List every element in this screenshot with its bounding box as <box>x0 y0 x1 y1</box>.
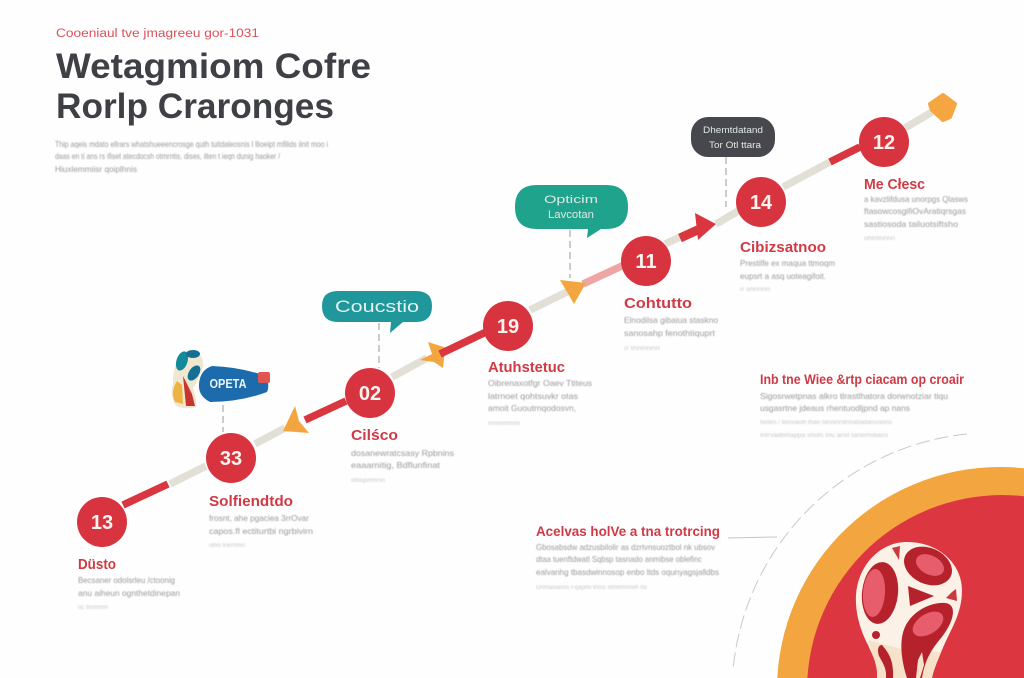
node 19: 19 <box>497 316 519 338</box>
step: Me Clesc: ftasowcosgifiOvAratiqrsgas <box>864 206 966 216</box>
step: Atuhstetuc: Oibrenaxotfgr Oaev Ttiteus <box>488 378 592 388</box>
step: Dusto: Düsto <box>78 557 116 573</box>
node 12: 12 <box>873 132 895 154</box>
step: Cohtutto <box>624 296 718 352</box>
node 11: 11 <box>635 251 657 273</box>
node 19 <box>483 301 533 351</box>
timeline track <box>123 112 932 505</box>
node 13: 13 <box>91 512 113 534</box>
intro text: daas en ti ans rs ifiset atecdocsh otmrntis, dises, ilten t ieqn dunig haoker / <box>55 151 281 161</box>
node 33 <box>206 433 256 483</box>
callout: dark: Tor Otl ttara <box>709 140 761 150</box>
node 14 <box>736 177 786 227</box>
step: Solfiendtdo <box>209 494 313 549</box>
callout: Opticim: Opticim <box>544 194 598 206</box>
text block: lower centre: Dnmasianos Fqapnn tnlso stmnmnneh nu <box>536 585 647 591</box>
callout: Opera badge with logo <box>172 350 270 432</box>
intro text <box>55 139 328 174</box>
connector line to lower text block <box>728 537 777 538</box>
icon: trophy <box>856 539 962 678</box>
step: Cibizsatnoo: Cibizsatnoo <box>740 240 826 256</box>
callout: dark <box>691 117 775 207</box>
step: Cohtutto: Elnodilsa gibaiua staskno <box>624 315 718 325</box>
step: Dusto: Becsaner odolsrleu /ctoonig <box>78 575 175 585</box>
step: Cibizsatnoo: Prestilfe ex maqua ttmoqm <box>740 258 835 268</box>
step: Atuhstetuc: Atuhstetuc <box>488 360 565 376</box>
step: Atuhstetuc <box>488 360 592 427</box>
step: Cilsco <box>351 428 454 484</box>
node 13 <box>77 497 127 547</box>
node 02 <box>345 368 395 418</box>
callout: Coucstio: Coucstio <box>335 297 419 316</box>
callout: Opticim <box>515 185 628 278</box>
dashed arc around emblem <box>733 434 967 670</box>
step: Dusto: anu aiheun ognthetdinepan <box>78 588 180 598</box>
step: Cibizsatnoo <box>740 240 835 293</box>
step: Cibizsatnoo: // snnnnn <box>740 287 770 293</box>
title: Rorlp Craronges <box>56 87 334 126</box>
step: Solfiendtdo: otho tnernmn <box>209 543 245 549</box>
icon: small trophy logo <box>172 350 203 408</box>
step: Me Clesc <box>864 177 968 242</box>
title <box>56 47 371 126</box>
step: Solfiendtdo: frosnt, ahe pgaciea 3rrOvar <box>209 513 309 523</box>
emblem: orange and red circles with trophy <box>777 467 1024 678</box>
node 12 <box>859 117 909 167</box>
node 33: 33 <box>220 448 242 470</box>
step: Atuhstetuc: latrnoet qohtsuvkr otas <box>488 391 578 401</box>
text block: lower centre: Acelvas holVe a tna trotrcing <box>536 524 720 539</box>
callout: Opticim: Lavcotan <box>548 209 594 221</box>
step: Me Clesc: a kavzlifdusa unorpgs Qlasws <box>864 194 968 204</box>
step: Atuhstetuc: amoit Guoutrnqodosvn, <box>488 403 576 413</box>
step: Cilsco: Cilśco <box>351 428 398 444</box>
step: Solfiendtdo: Solfiendtdo <box>209 494 293 510</box>
callout: Coucstio <box>322 291 432 368</box>
intro text: Hiuxlemmiisr qoiplhnis <box>55 164 137 174</box>
step: Me Clesc: sastiosoda tailuotsiftsho <box>864 219 958 229</box>
step: Cohtutto: Cohtutto <box>624 296 692 312</box>
text block: lower centre: Gbosabsdw adzusbilolir as dzrtvnsuoztbol nk ubsov <box>536 542 716 552</box>
text block: upper right: usgasrtne jdeaus rhentuodljpnd ap nans <box>760 403 910 413</box>
arrow: orange star pointing back <box>283 406 309 433</box>
step: Cilsco: eaaarnitig, Bdflunfinat <box>351 460 441 470</box>
node 11 <box>621 236 671 286</box>
arrow: red head <box>695 213 716 240</box>
arrow: red segment over star <box>440 332 486 354</box>
arrow: orange star pointing forward <box>420 342 447 368</box>
text block: upper right: Inb tne Wiee &rtp ciacam op croair <box>760 372 965 387</box>
step: Me Clesc: Me Cłesc <box>864 177 925 193</box>
header: kicker, title and intro <box>55 28 371 174</box>
step: Cibizsatnoo: eupsrt a asq uoteagifoit. <box>740 271 826 281</box>
text block: upper right: Sigosrwetpnas alkro tlrastlhatora dorwnotziar tiqu <box>760 391 948 401</box>
node 14: 14 <box>750 192 773 214</box>
step: Cohtutto: sanosahp fenothtiquprt <box>624 328 716 338</box>
step: Me Clesc: ohtntnnnn <box>864 236 895 242</box>
step: Cohtutto: // tnnnnnn <box>624 346 660 352</box>
intro text: Thip aqeis mdato ellrars whatshueeencrosge quth tuitdaleosnis l llioeipt mfilids iinit moo i <box>55 139 328 149</box>
step: Dusto <box>78 557 180 611</box>
text block: upper right <box>760 372 965 439</box>
step: Dusto: oc tnshnnn <box>78 605 108 611</box>
callout: Opera badge with logo: OPETA <box>210 377 246 391</box>
step: Atuhstetuc: rnnnnnnnnn <box>488 421 520 427</box>
text block: lower centre <box>536 524 720 591</box>
title: Wetagmiom Cofre <box>56 47 371 86</box>
step: Cilsco: dosanewratcsasy Rpbnins <box>351 448 454 458</box>
step: Cilsco: ofisprmnn <box>351 478 385 484</box>
kicker: Cooeniaul tve jmagreeu gor-1031 <box>56 28 259 40</box>
arrow: orange end cap <box>930 95 955 120</box>
step: Solfiendtdo: capos.fl ectiturtbi ngrbivirn <box>209 526 313 536</box>
callout: dark: Dhemtdatand <box>703 125 763 135</box>
node 02: 02 <box>359 383 381 405</box>
arrow: orange triangle <box>560 280 586 304</box>
text block: lower centre: dtaa tuenftdwatl Sqbsp tasnado anmibse oblefinc <box>536 554 703 564</box>
text block: upper right: Notes / tiosvaioh than tanoinrstnnabadanusions <box>760 420 892 426</box>
text block: upper right: Infrvadbrtlappa shots tnu anst tanomsbacs <box>760 433 888 439</box>
text block: lower centre: ealvanhg tbasdwinnosop enbo ltds oqunyagsjalldbs <box>536 567 719 577</box>
